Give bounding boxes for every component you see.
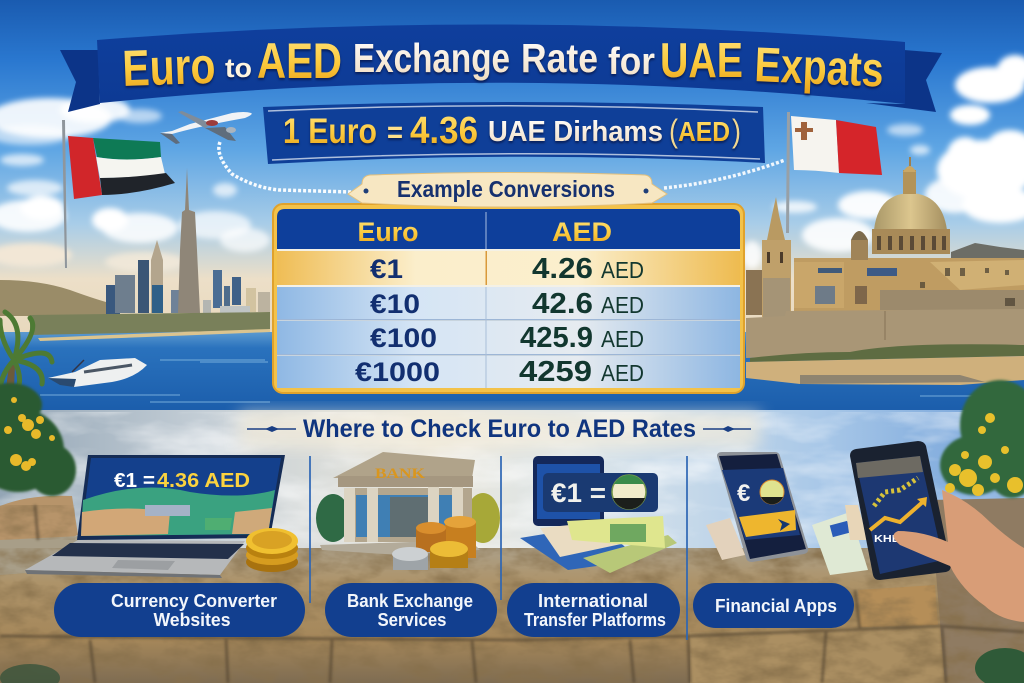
pill: international transfer platforms: Transfer Platforms [524,610,666,630]
row: 100 euro [370,322,644,354]
banner body [97,24,905,104]
table frame [273,204,744,393]
item: international transfer platforms [507,456,680,637]
pill: currency converter websites [54,583,305,637]
icon: yacht [48,358,147,387]
rate text: UAE Dirhams [488,116,663,148]
icon: coin stacks [392,516,476,570]
background: sky [0,0,1024,340]
row: 1000 euro: 4259 [519,356,592,388]
title text: AED [257,33,342,89]
icon: flowering bush right [940,380,1024,498]
pill: currency converter websites: Websites [154,610,230,630]
row: 10 euro: €10 [370,289,420,319]
pill: currency converter websites: Currency Converter [111,591,277,611]
rate text: ) [732,113,741,149]
row: 1000 euro [355,356,644,388]
rate text: 1 Euro [283,112,377,151]
row: 1000 euro: AED [601,360,644,386]
icon: phone with euro card [717,452,808,562]
rate text: AED [678,116,730,147]
icon: foliage bottom right [975,648,1024,683]
icon: gold coins [246,528,298,572]
title text: Rate [521,35,598,81]
table rows background [277,249,740,388]
scene: palm tree [0,312,52,412]
row: 1 euro: 4.26 [532,253,593,285]
title text: UAE [660,34,743,88]
icon: tablet with rate card [520,456,658,570]
rate text: 4.36 [410,110,478,152]
ribbon: example conversions: Example Conversions [397,176,615,202]
background: sea [0,332,1024,412]
icon: Malta flag [786,112,882,233]
row: 100 euro: €100 [370,323,437,353]
icon: tablet with rate card: €1 = [551,478,606,508]
icon: phone with chart held in hand: KHE [874,534,900,545]
rate text [283,110,741,152]
icon: bank building: BANK [375,466,425,482]
rate text: = [387,116,403,149]
scene: rocky shore right [746,356,1024,385]
row: 1 euro: AED [601,257,644,283]
title text: for [608,41,655,83]
icon: banknotes beside phones [706,505,868,575]
banner tail right [866,50,942,112]
banner tail left [60,50,100,112]
panel: stone wall [0,496,1024,683]
row: 1000 euro: €1000 [355,357,440,387]
title text: Exchange [353,35,510,81]
icon: UAE flag [62,120,175,268]
icon: phone with euro card: € [737,480,750,507]
row: 100 euro: AED [601,326,644,352]
icon: foliage bottom left [0,664,60,683]
arrow: dotted flight path right [664,160,785,188]
row: 1 euro [370,253,644,285]
title text [121,33,885,98]
item: bank exchange services [316,452,500,637]
pill: bank exchange services: Bank Exchange [347,591,473,611]
background: sea highlights [40,360,985,402]
panel: soft cloud texture [0,412,1024,572]
icon: phone with chart held in hand [850,441,951,580]
arrow: dotted flight path left [219,142,352,192]
icon: hand [893,490,1024,622]
dividers [310,456,687,640]
pill: international transfer platforms: International [538,591,648,611]
icon: flowering bush left [0,383,76,496]
rate text: ( [669,113,678,149]
icon: laptop [25,455,285,578]
item: currency converter websites [25,455,305,637]
title text: Expats [754,38,885,98]
scene: Dubai skyline [106,168,270,318]
title banner [60,24,942,112]
row: 10 euro [370,288,644,320]
row: 100 euro: 425.9 [520,322,593,354]
pill: bank exchange services: Services [378,610,446,630]
row: 10 euro: 42.6 [532,288,593,320]
row: 10 euro: AED [601,292,644,318]
scene: distant hills left [0,280,106,316]
panel: warm light behind heading [240,412,760,448]
ribbon: example conversions [348,172,667,207]
title text: to [225,53,252,83]
conversions table [273,204,744,393]
pill: international transfer platforms [507,583,680,637]
pill: financial apps: Financial Apps [715,596,837,616]
background: clouds left [0,97,270,272]
scene: shoreline left [30,312,270,341]
scene: Malta cityscape [746,157,1024,362]
icon: laptop: €1 = [114,470,155,492]
row: 1 euro: €1 [370,254,403,284]
pill: bank exchange services [325,583,497,637]
rate banner [263,102,765,164]
heading: where to check: Where to Check Euro to AED Rates [303,415,696,443]
table header: Euro [358,217,418,247]
table header [277,209,740,249]
rate banner rules [268,106,760,160]
icon: airplane [160,111,252,144]
panel: lower background [0,410,1024,580]
background: clouds right [742,55,1024,269]
pill: financial apps [693,583,854,628]
title text: Euro [121,37,216,97]
rate banner body [263,102,765,164]
table header: AED [552,217,612,247]
icon: banknotes [540,516,677,573]
icon: laptop: 4.36 AED [157,470,250,492]
item: financial apps [693,441,1024,628]
icon: bank building [316,452,500,555]
